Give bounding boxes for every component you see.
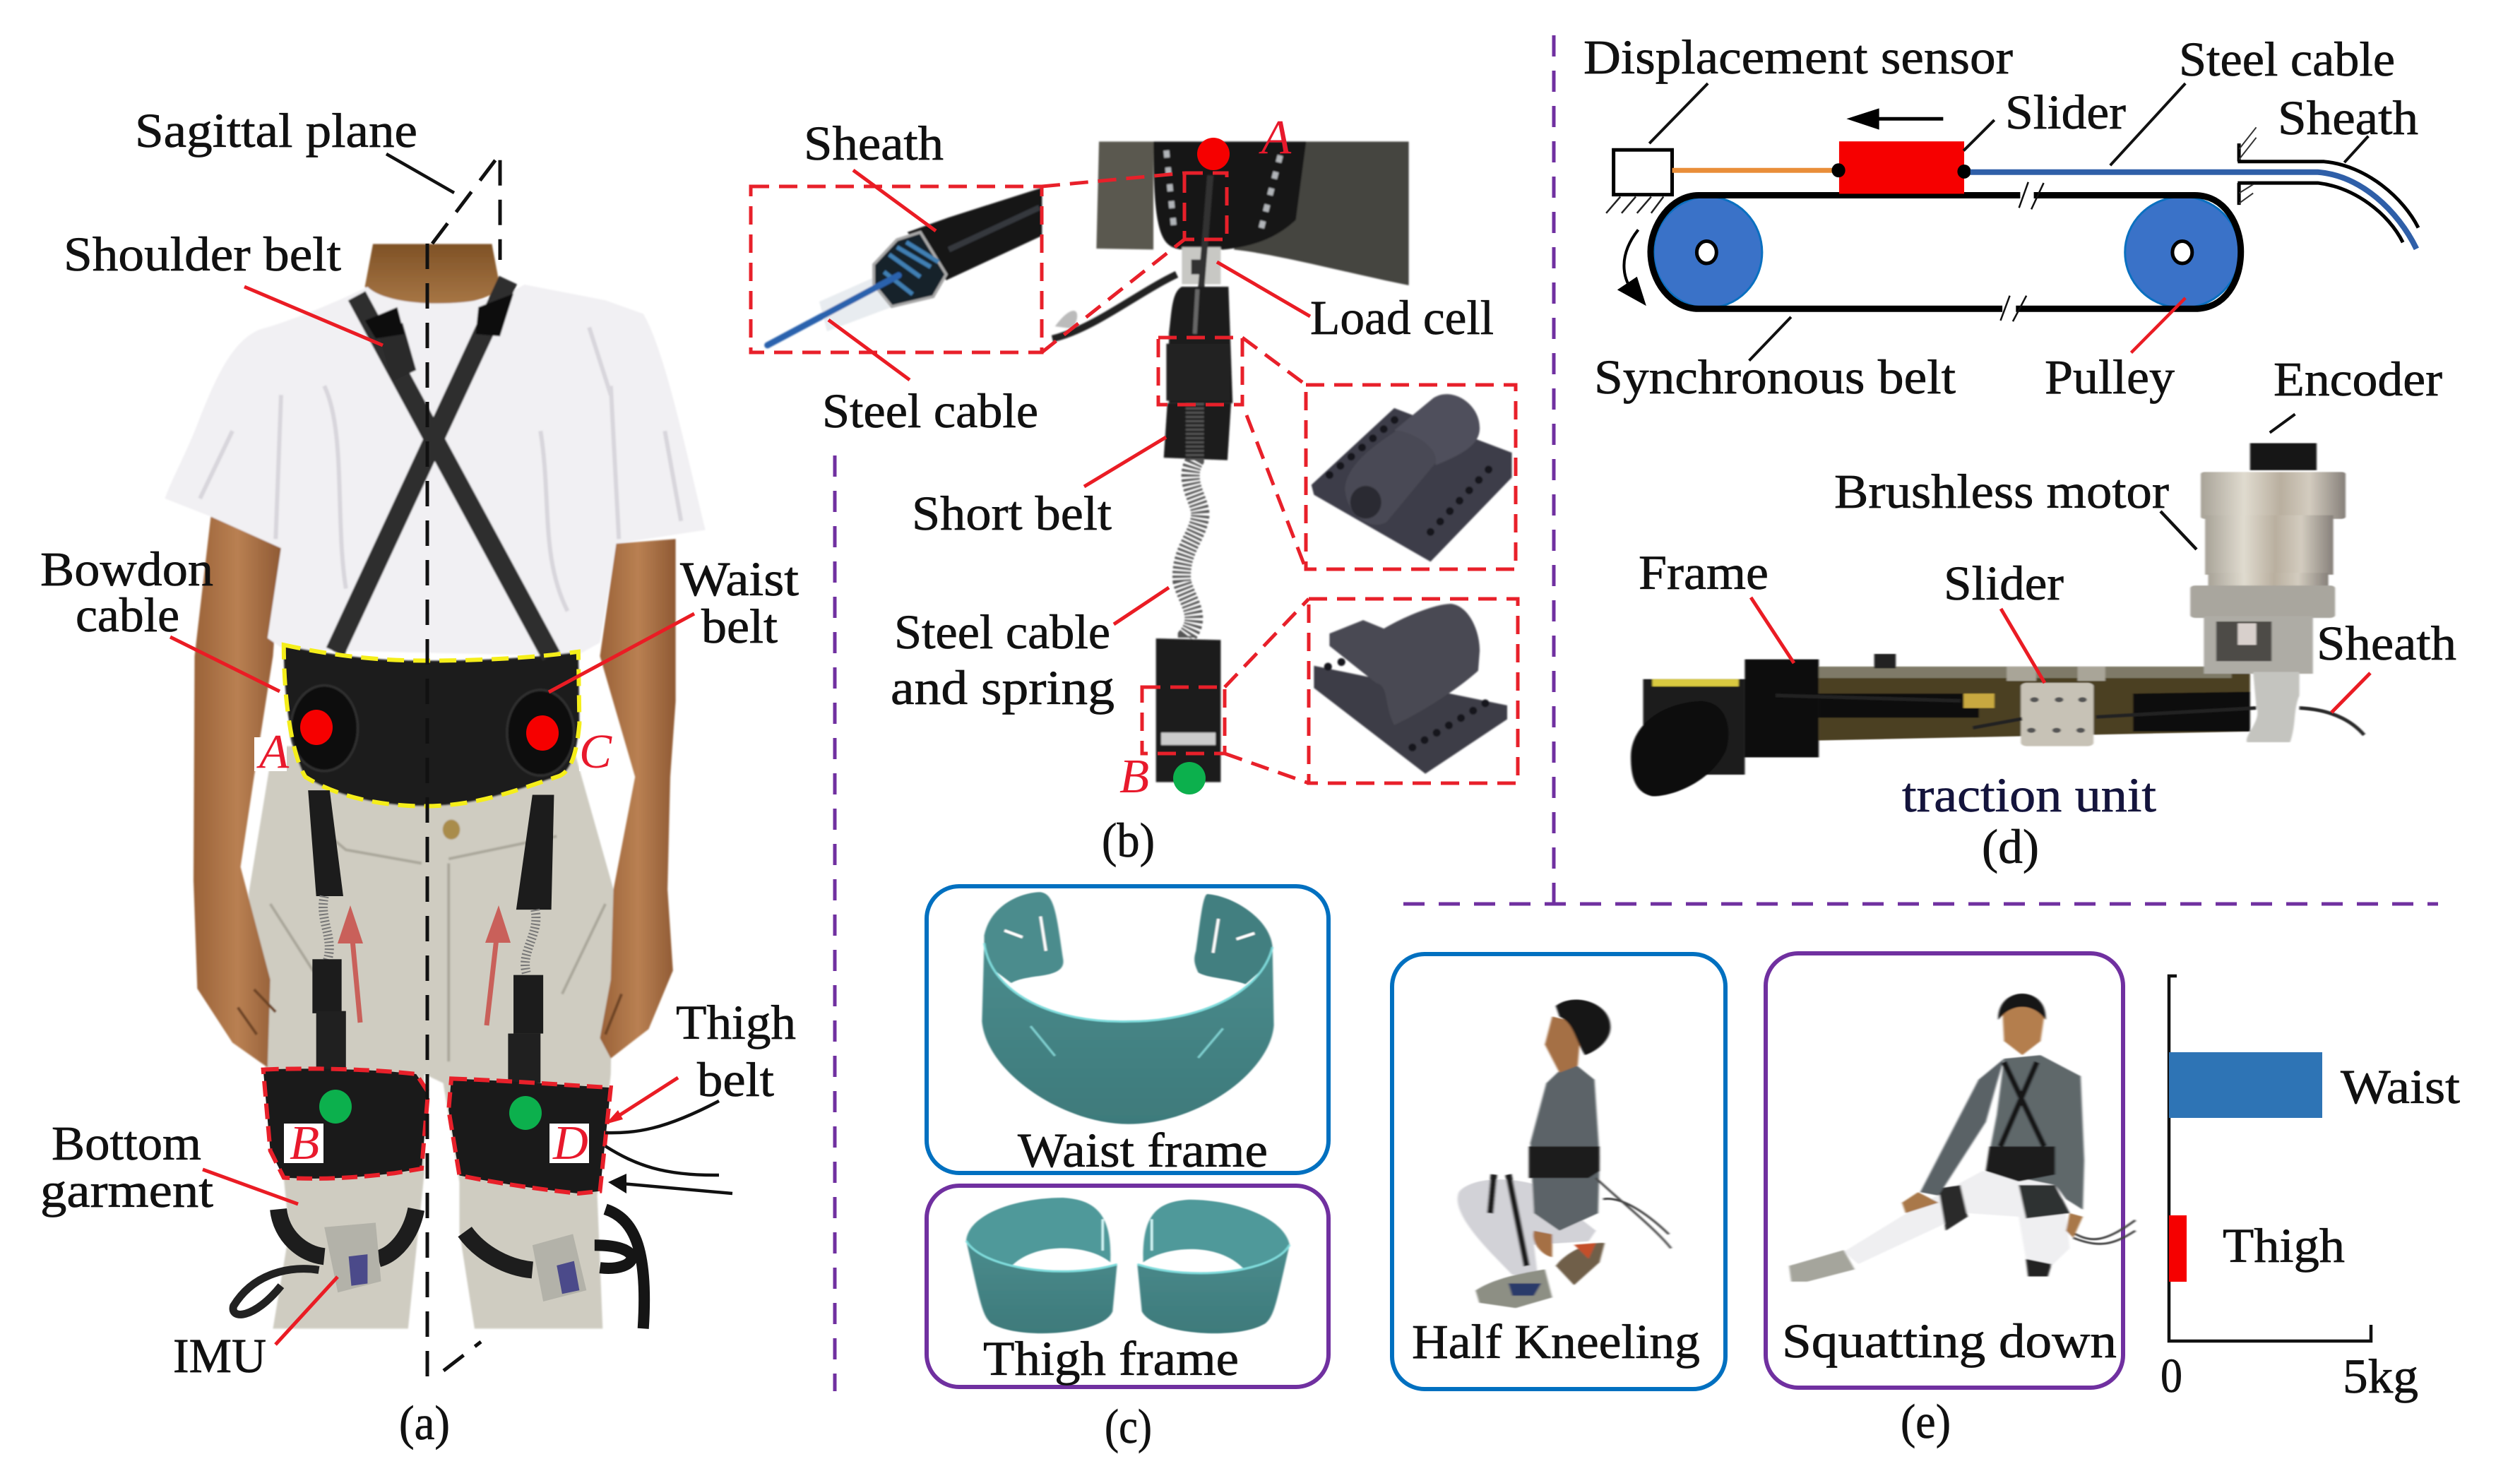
photo: half kneeling person	[1458, 1000, 1671, 1308]
leader lines	[1751, 511, 2370, 713]
point letter A: A	[256, 725, 290, 778]
caption (c): (c)	[1105, 1400, 1152, 1453]
label: Sheath: Sheath	[2278, 91, 2418, 145]
label: Short belt: Short belt	[912, 487, 1112, 540]
red point C	[526, 715, 559, 751]
label: Steel cable: Steel cable	[822, 384, 1038, 438]
label: Steel cable (spring): Steel cable	[894, 605, 1110, 659]
red point A	[300, 710, 333, 745]
label: Load cell: Load cell	[1310, 291, 1494, 345]
sagittal plane dashed lines	[427, 154, 500, 1381]
photo: sheath cross-section	[768, 188, 1042, 345]
label: Encoder: Encoder	[2274, 352, 2442, 406]
leader lines	[170, 154, 694, 1345]
panel c: frames	[927, 886, 1329, 1453]
label: Thigh: Thigh	[676, 996, 796, 1049]
label: Slider: Slider	[2005, 85, 2126, 139]
caption (d): (d)	[1982, 820, 2039, 874]
photo: belt section with cable and spring	[1052, 142, 1409, 782]
photo: squatting down person	[1789, 994, 2135, 1282]
caption (a): (a)	[399, 1396, 450, 1450]
point letter B: B	[290, 1116, 319, 1169]
panel e: postures and load	[1392, 953, 2460, 1448]
red dashed zoom boxes	[751, 173, 1518, 783]
label: Sheath: Sheath	[804, 117, 944, 170]
caption (e): (e)	[1901, 1395, 1951, 1448]
label: Shoulder belt: Shoulder belt	[64, 227, 341, 281]
label: Brushless motor: Brushless motor	[1834, 465, 2169, 518]
force arrow right	[485, 905, 511, 1025]
label: Steel cable: Steel cable	[2179, 32, 2395, 86]
label: Displacement sensor: Displacement sensor	[1583, 30, 2013, 84]
photo: standing person wearing the suit	[165, 244, 706, 1328]
thigh frame box	[927, 1186, 1329, 1387]
bar chart: load	[2161, 976, 2460, 1403]
label: Waist bar: Waist	[2341, 1060, 2460, 1114]
schematic: belt drive	[1606, 83, 2418, 433]
point letter C: C	[579, 725, 612, 778]
dashed divider: right vertical	[1552, 35, 1555, 904]
force arrow left	[338, 905, 363, 1023]
green point D	[509, 1096, 542, 1130]
label: Slider (photo): Slider	[1944, 556, 2064, 610]
label: cable: cable	[76, 588, 179, 642]
chart axes	[2169, 976, 2371, 1341]
label: Waist frame: Waist frame	[1018, 1124, 1268, 1177]
label: Synchronous belt: Synchronous belt	[1594, 350, 1956, 404]
dashed divider: left vertical	[833, 455, 836, 1391]
label boxes	[254, 737, 610, 1163]
panel b: cable and mounts	[751, 110, 1518, 867]
label: Sagittal plane: Sagittal plane	[135, 104, 417, 157]
label: Bottom: Bottom	[52, 1116, 201, 1170]
waist frame 3D model	[982, 892, 1274, 1124]
label: Waist: Waist	[680, 552, 799, 606]
half kneeling box	[1392, 954, 1725, 1389]
label: Frame: Frame	[1639, 546, 1769, 600]
red point A	[1197, 138, 1230, 170]
label: belt thigh: belt	[697, 1053, 774, 1107]
label: belt: belt	[701, 600, 778, 653]
point letter D: D	[552, 1116, 588, 1169]
label: Thigh frame: Thigh frame	[983, 1332, 1239, 1386]
photo: traction unit hardware	[1631, 443, 2364, 797]
panel a: worn exosuit on body	[40, 104, 799, 1450]
label: garment: garment	[40, 1164, 213, 1217]
label: Half Kneeling: Half Kneeling	[1412, 1315, 1700, 1369]
green point B	[319, 1090, 352, 1124]
dashed divider: horizontal	[1403, 903, 2438, 905]
photo: upper 3D printed mount	[1312, 394, 1512, 561]
label: traction unit: traction unit	[1902, 768, 2156, 822]
label: Sheath (photo): Sheath	[2317, 617, 2456, 670]
point letter B: B	[1119, 749, 1149, 803]
label: Bowdon: Bowdon	[40, 542, 213, 596]
bar: thigh	[2169, 1215, 2187, 1282]
bar: waist	[2169, 1052, 2322, 1118]
point letter A: A	[1259, 110, 1292, 164]
leader lines	[828, 170, 1310, 624]
thigh frame 3D model	[966, 1198, 1290, 1333]
caption (b): (b)	[1102, 814, 1155, 867]
label: Thigh bar: Thigh	[2223, 1219, 2345, 1273]
label: Pulley: Pulley	[2045, 350, 2175, 404]
panel d: traction unit	[1583, 30, 2456, 874]
label: Squatting down: Squatting down	[1782, 1314, 2117, 1368]
thigh hardware: belts, cables, IMUs	[233, 790, 644, 1328]
squatting down box	[1766, 953, 2123, 1388]
tick label 5kg: 5kg	[2343, 1350, 2418, 1403]
waist belt outline	[284, 645, 579, 806]
waist frame box	[927, 886, 1329, 1173]
label: IMU: IMU	[173, 1329, 266, 1383]
photo: lower 3D printed mount	[1314, 604, 1507, 774]
label: and spring: and spring	[891, 661, 1115, 715]
green point B	[1173, 762, 1206, 794]
tick label 0: 0	[2161, 1349, 2182, 1402]
thigh wires and arrow	[605, 1101, 732, 1193]
